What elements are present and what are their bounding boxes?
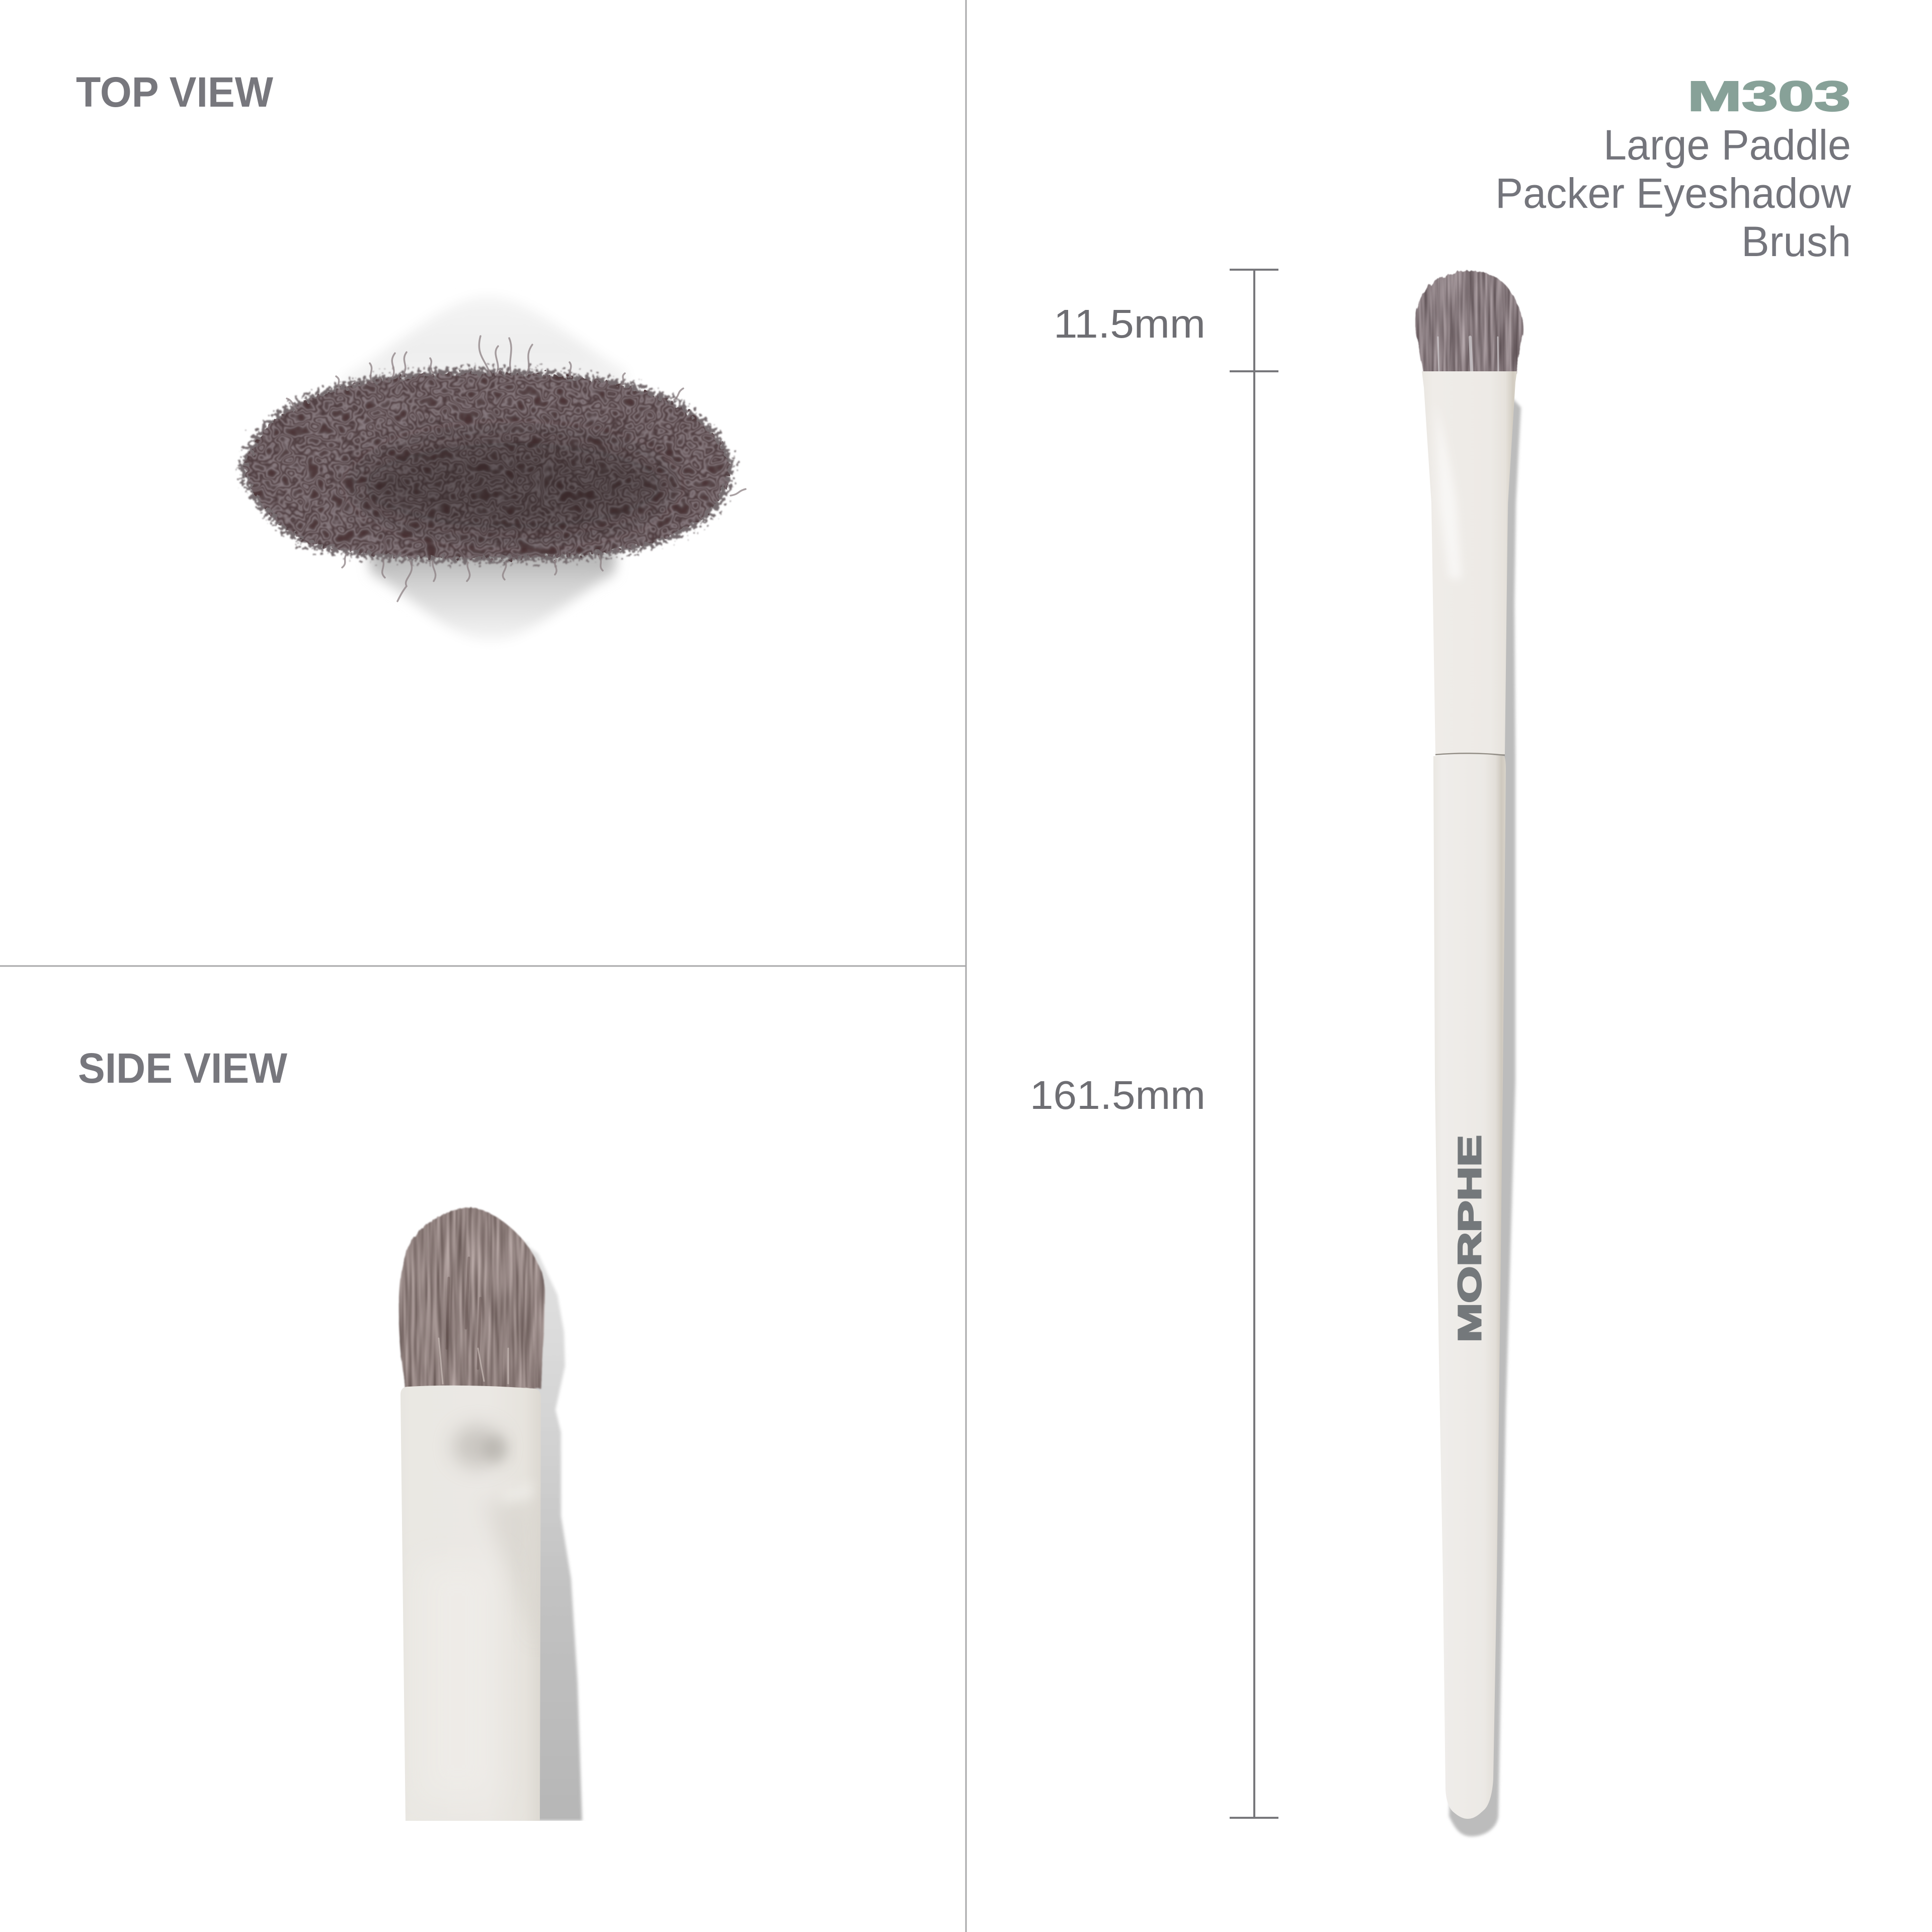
- bristle streaks: [439, 1258, 508, 1384]
- bristle mass: [245, 373, 729, 557]
- heading: top view: TOP VIEW: [76, 68, 274, 116]
- panel: product: [1030, 72, 1851, 1836]
- bristles: [399, 1208, 545, 1389]
- light gaps between bristles: [1438, 337, 1498, 371]
- ferrule crimp shading: [453, 1425, 503, 1468]
- product name: Packer Eyeshadow: [1495, 170, 1851, 217]
- panel: top view: [76, 68, 746, 640]
- ferrule highlight: [1436, 403, 1462, 579]
- lower handle: [1433, 754, 1506, 1819]
- handle brand: MORPHE: [1452, 1135, 1488, 1342]
- product name: Brush: [1741, 218, 1851, 265]
- full brush: [1416, 271, 1523, 1836]
- stray hairs: [287, 336, 746, 601]
- bristle head: [1416, 271, 1523, 373]
- panel: side view: [78, 1044, 604, 1836]
- soft shadow above the bristles: [342, 297, 626, 433]
- brush tip seen from the side: [397, 1206, 584, 1821]
- cast shadow: [523, 1243, 582, 1821]
- brush cast shadow: [1449, 397, 1521, 1836]
- label: bristle length: 11.5mm: [1054, 301, 1205, 346]
- upper handle / ferrule: [1422, 371, 1517, 754]
- product name: [1495, 121, 1851, 265]
- label: handle length: 161.5mm: [1030, 1073, 1205, 1117]
- fuzzy outer bristle edge: [239, 369, 734, 561]
- brush tip seen from above: [239, 297, 746, 640]
- dark core of the bristles: [352, 433, 674, 538]
- product name: Large Paddle: [1603, 121, 1851, 169]
- clean cut at the bottom of the crop: [392, 1821, 604, 1836]
- model number: M303: [1687, 72, 1850, 120]
- heading: side view: SIDE VIEW: [78, 1044, 288, 1092]
- panel dividers: [0, 0, 966, 1932]
- soft shadow below the bristles: [367, 548, 616, 640]
- ferrule: [400, 1386, 540, 1821]
- handle seam: [1435, 753, 1505, 755]
- dimension scale: [1230, 270, 1278, 1818]
